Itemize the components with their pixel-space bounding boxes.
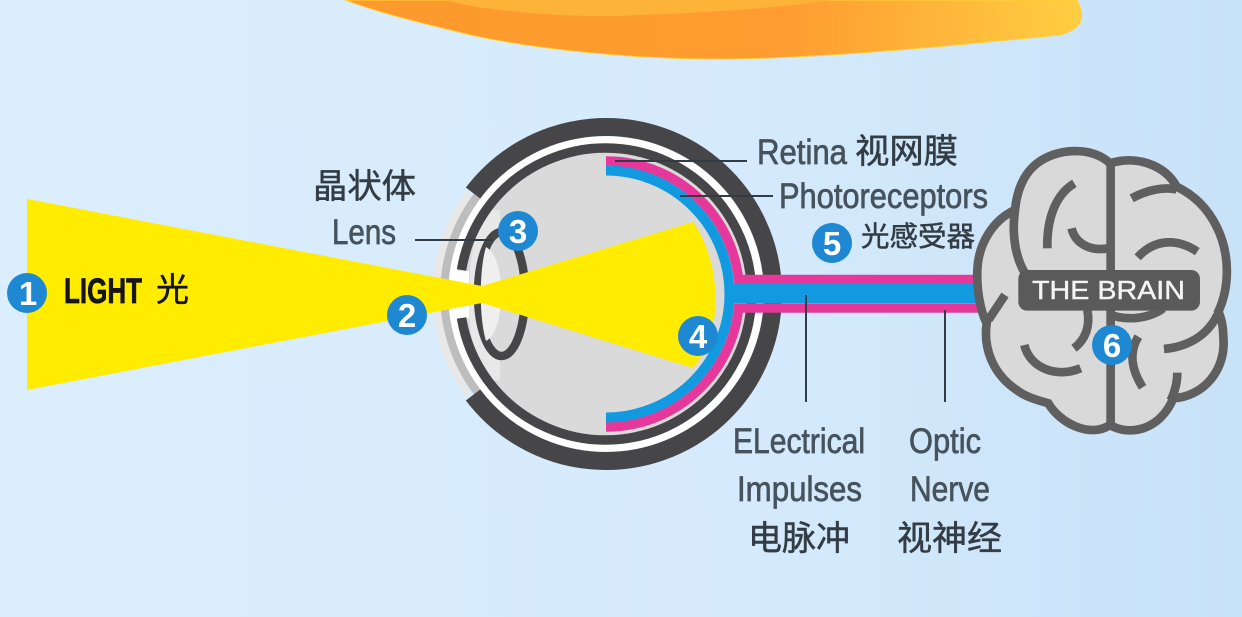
label: photoreceptors: 光感受器 [861,221,975,252]
label: electrical impulses [733,422,865,558]
label: lens: Lens [332,213,396,252]
eye [432,127,984,461]
label: lens: 晶状体 [313,168,416,206]
badge 2: 2 [398,297,416,334]
label: photoreceptors: Photoreceptors [779,177,988,216]
label: optic nerve: 视神经 [897,520,1002,558]
brain label text: THE BRAIN [1032,275,1185,305]
lens [478,232,525,356]
sun bottom edge [345,0,1082,59]
label: optic nerve [897,422,1002,558]
retina [606,161,984,427]
label: retina: Retina [757,133,847,172]
badge 4 [678,316,718,356]
label: photoreceptors [779,177,988,252]
badge 6 [1092,325,1132,365]
label: retina [757,133,958,172]
light beam [27,199,716,390]
badge 4: 4 [689,318,708,355]
label: optic nerve: Optic [909,422,981,461]
label: lens [313,168,416,252]
leader lines [415,161,945,402]
badge 1 [7,273,47,313]
label: electrical impulses: 电脉冲 [748,520,850,558]
sclera inner ring [462,148,752,440]
label: light: LIGHT [64,272,142,311]
sclera outer ring [473,127,773,461]
badge 3: 3 [509,213,527,250]
badge 5 [812,223,852,263]
label: electrical impulses: Impulses [737,470,862,509]
optic nerve [729,284,984,303]
brain label plate [1018,270,1200,311]
white ring [452,140,760,448]
photoreceptors [606,170,730,418]
label: light: 光 [156,271,189,308]
badge 2 [387,295,427,335]
brain [977,151,1227,430]
badge 3 [498,211,538,251]
cornea [432,186,480,402]
label: electrical impulses: ELectrical [733,422,865,461]
label: optic nerve: Nerve [910,470,990,509]
eyeball [464,152,748,436]
badge 6: 6 [1103,327,1121,364]
label: retina: 视网膜 [855,133,958,171]
badge 1: 1 [19,275,37,312]
badge 5: 5 [823,225,841,262]
